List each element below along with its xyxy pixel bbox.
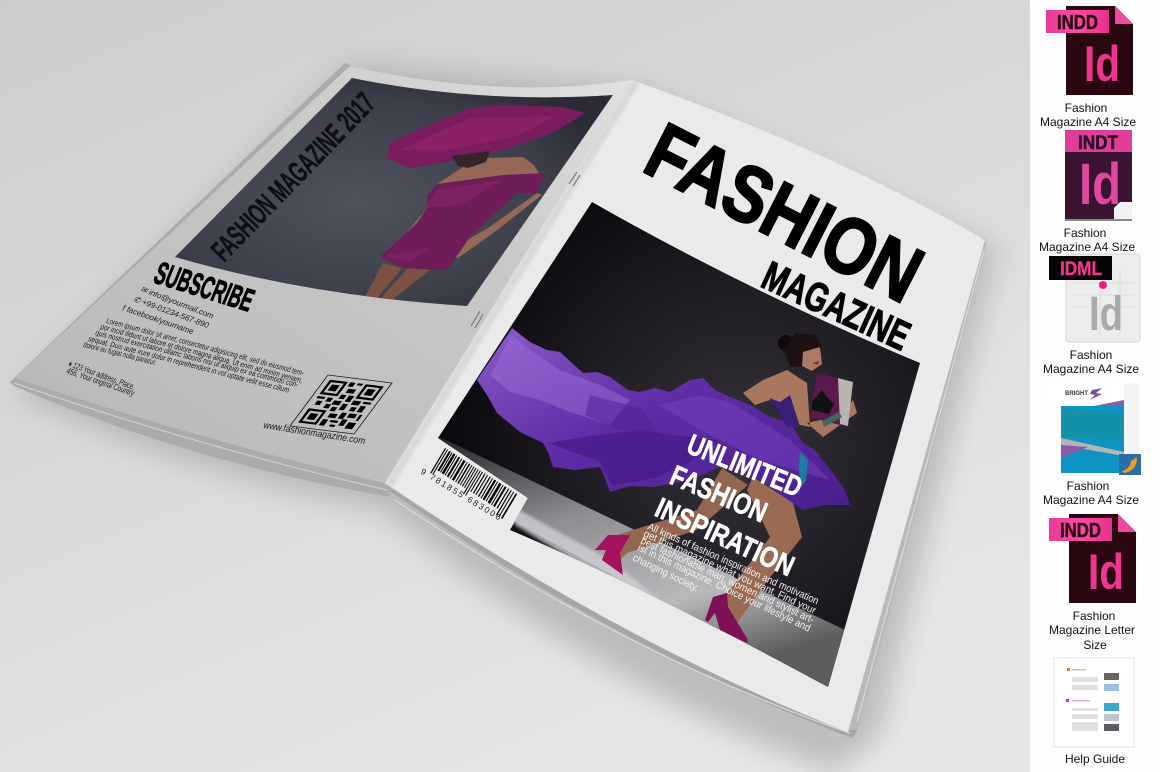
icon: purple dress [380,173,545,270]
address: 456, Your original Country [65,365,136,398]
body copy: por incid ilidunt ut labore et dolore magna aliqua. Ut enim ad minim veniam, [99,322,304,385]
icon: model arms and chest [394,157,542,258]
panel: back cover [15,66,632,483]
cover blurb: get this magazine what you want. Find your [642,528,818,617]
barcode bars [430,448,517,519]
icon: INDT file: Id [1079,152,1121,217]
contact lines: ✉ info@yourmail.com [139,284,215,321]
cover photo [420,195,930,700]
label: fashion magazine A4: Magazine A4 Size [1043,362,1139,376]
icon: dress train [477,328,850,510]
label: fashion magazine A4: Magazine A4 Size [1043,493,1139,507]
icon: IDML file: IDML [1060,259,1102,280]
contact lines [121,284,215,336]
body copy: dolore eu fugiat nulla pariatur. [83,340,157,367]
cover headline: UNLIMITED [682,429,807,504]
body copy: sequat. Duis aute irure dolor in reprehenderit in vol uptate velit esse cillum [87,334,290,395]
icon: front leg [723,477,802,623]
icon: model legs [365,263,430,300]
runway floor [438,436,844,687]
body copy: quis nostrud exercitation ullamc laboris nisi ut aliquip ex ea commodo con- [94,328,299,389]
panel: magazine mockup [10,63,1000,772]
icon: flyer preview [1048,383,1141,475]
icon: clutch book [810,373,853,427]
icon: teal ribbon [799,452,808,488]
label: fashion magazine A4: Magazine A4 Size [1039,240,1135,254]
icon: rear heel [595,535,630,575]
label: fashion magazine letter: Fashion [1073,609,1115,623]
book shadow [15,66,1000,772]
cover title: MAGAZINE: MAGAZINE [755,252,917,359]
cover blurb: ist in this magazine. Choice your lifestyle and [636,542,812,635]
icon: INDD file: INDD [1057,12,1098,34]
icon: face [802,347,822,371]
contact lines: f facebook/yourname [121,303,195,336]
cover headline [650,429,807,583]
icon: INDT file [1065,130,1132,221]
label: fashion magazine A4: Fashion [1064,226,1106,240]
label: fashion magazine A4: Magazine A4 Size [1040,115,1136,129]
icon: INDD letter file [1049,514,1136,603]
icon: corset [769,395,800,427]
icon: INDD file [1046,6,1133,95]
contact lines: ✆ +99-01234-567-890 [132,294,211,330]
panel: front cover [385,80,985,732]
cover headline: FASHION [665,460,772,529]
cover blurb: All kinds of fashion inspiration and motivation [646,521,821,607]
QR code [290,375,392,434]
icon: INDD letter file: INDD [1060,520,1101,542]
icon: bracelet [822,412,842,427]
label: fashion magazine letter: Size [1083,638,1107,652]
cover title: FASHION: FASHION [632,106,936,320]
spine staples [471,172,580,328]
address [65,358,137,398]
icon: rear leg [617,468,748,563]
icon: flyer preview: BRIGHT [1065,391,1088,397]
icon: model back and arms [743,370,857,437]
icon: IDML file: Id [1089,288,1123,341]
barcode digits: 9 781855 683006 [419,466,503,522]
barcode label [419,448,517,522]
body copy: Lorem ipsum dolor sit amet, consectetur adipisicing elit, sed do eiusmod tem- [105,316,305,378]
label: fashion magazine letter: Magazine Letter [1049,623,1135,637]
page block: right [385,238,986,732]
label: fashion magazine A4: Fashion [1067,479,1109,493]
page block: left [10,63,390,497]
icon: INDD letter file: Id [1088,544,1124,600]
sidebar panel [1030,0,1160,772]
website URL: www.fashionmagazine.com [263,420,366,447]
subscribe heading: SUBSCRIBE [149,255,259,318]
icon: INDT file: INDT [1078,133,1118,154]
cover blurb: changing society. [631,552,701,594]
cover headline: INSPIRATION [650,492,799,583]
address: ♦ 123 Your address, Place, [67,358,137,392]
icon: front heel [705,593,748,643]
back cover photo [170,70,620,310]
icon: hair [778,335,792,350]
icon: IDML file [1049,254,1140,342]
icon: INDD file: Id [1084,36,1120,92]
label: fashion magazine A4: Fashion [1070,348,1112,362]
icon: help guide preview [1054,658,1134,747]
cover blurb: best fashionable man, women and stylist art- [639,535,816,626]
body copy [83,316,305,395]
label: help guide: Help Guide [1065,752,1125,766]
icon: giant hat [387,105,585,168]
label: fashion magazine A4: Fashion [1065,101,1107,115]
